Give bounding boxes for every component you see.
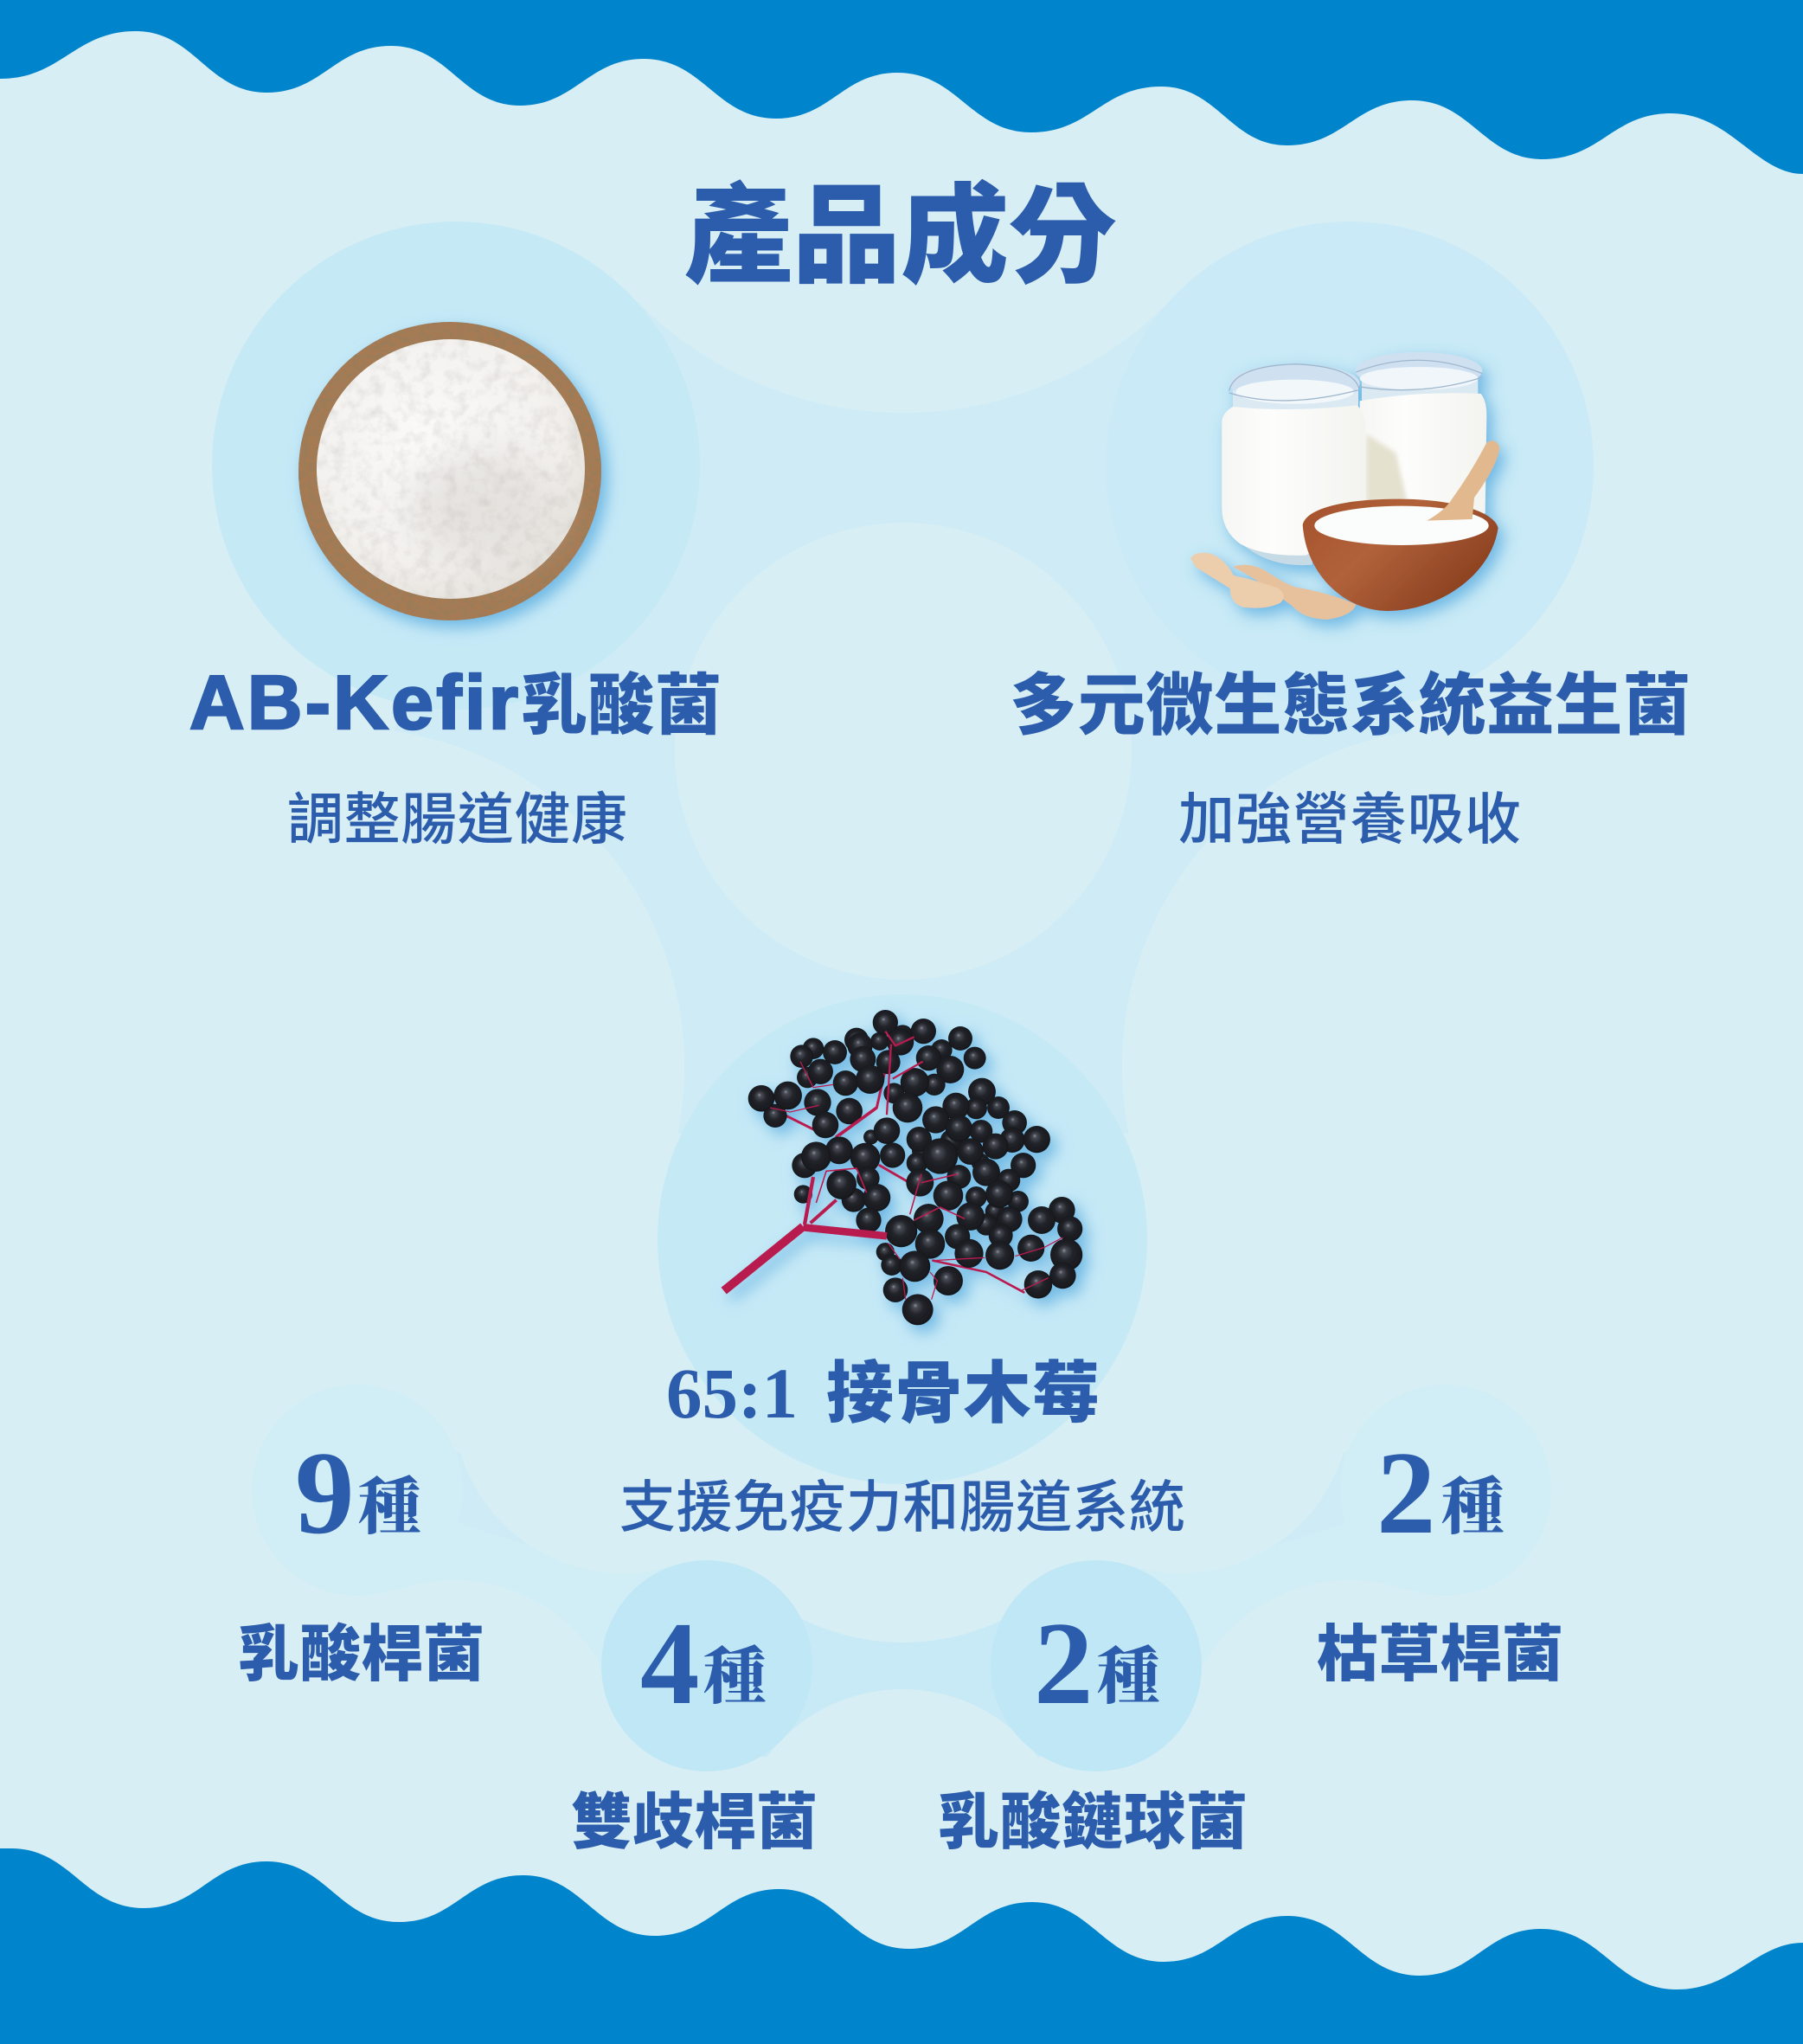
circle: 2 strains right <box>1340 1385 1551 1596</box>
stat: 9 strains <box>295 1427 420 1559</box>
front jar <box>1222 364 1365 565</box>
label: bacillus subtilis: 枯草桿菌 <box>1317 1605 1563 1694</box>
stat: 2 strains right <box>1376 1427 1504 1559</box>
image: elderberry cluster <box>724 1010 1082 1325</box>
wooden spoons <box>1190 553 1356 620</box>
stat: 4 strains <box>640 1597 766 1729</box>
back jar <box>1356 352 1486 513</box>
title: 產品成分 <box>684 148 1117 305</box>
spoon in bowl <box>1427 440 1499 521</box>
circle: powder backdrop <box>212 222 700 710</box>
stat: 9 strains: 種 <box>358 1456 420 1546</box>
circle: 4 strains <box>601 1560 812 1771</box>
stat: 2 strains lower: 種 <box>1097 1626 1159 1716</box>
text: nutrient absorption: 加強營養吸收 <box>1178 774 1521 855</box>
heading: AB-Kefir lactic acid bacteria: 乳酸菌 <box>521 652 722 749</box>
stat: 2 strains right: 2 <box>1376 1427 1436 1559</box>
label: bifidobacterium: 雙歧桿菌 <box>571 1773 818 1861</box>
label: lactobacillus: 乳酸桿菌 <box>238 1605 484 1694</box>
heading: 65:1 elderberry: 接骨木莓 <box>826 1340 1100 1437</box>
stat: 4 strains: 種 <box>703 1626 766 1716</box>
bottom wave <box>0 1848 1803 2044</box>
heading: multi-ecosystem probiotics: 多元微生態系統益生菌 <box>1010 652 1691 749</box>
label: streptococcus: 乳酸鏈球菌 <box>938 1773 1248 1861</box>
stat: 2 strains lower: 2 <box>1034 1597 1094 1729</box>
wooden bowl <box>1303 499 1498 611</box>
stat: 2 strains lower <box>1034 1597 1159 1729</box>
circle: yogurt backdrop <box>1106 222 1594 710</box>
stems over berries <box>724 1032 1062 1300</box>
circle: elderberry backdrop <box>658 994 1147 1484</box>
image: bowl of powder <box>298 322 601 620</box>
stems behind berries <box>770 1044 1023 1292</box>
stat: 4 strains: 4 <box>640 1597 699 1729</box>
stat: 2 strains right: 種 <box>1441 1456 1504 1546</box>
heading: AB-Kefir lactic acid bacteria <box>189 652 722 749</box>
text: immune and intestinal support: 支援免疫力和腸道系統 <box>619 1462 1185 1543</box>
heading: AB-Kefir lactic acid bacteria: AB-Kefir <box>189 659 518 745</box>
circle: 2 strains lower <box>991 1560 1202 1771</box>
heading: 65:1 elderberry: 65:1 <box>666 1353 798 1433</box>
circle: 9 strains <box>252 1385 463 1596</box>
berries <box>748 1010 1082 1325</box>
stat: 9 strains: 9 <box>295 1427 355 1559</box>
text: intestinal health: 調整腸道健康 <box>287 774 627 855</box>
image: yogurt jars, bowl and spoons <box>1190 352 1499 620</box>
top wave <box>0 0 1803 174</box>
heading: 65:1 elderberry <box>666 1340 1100 1437</box>
